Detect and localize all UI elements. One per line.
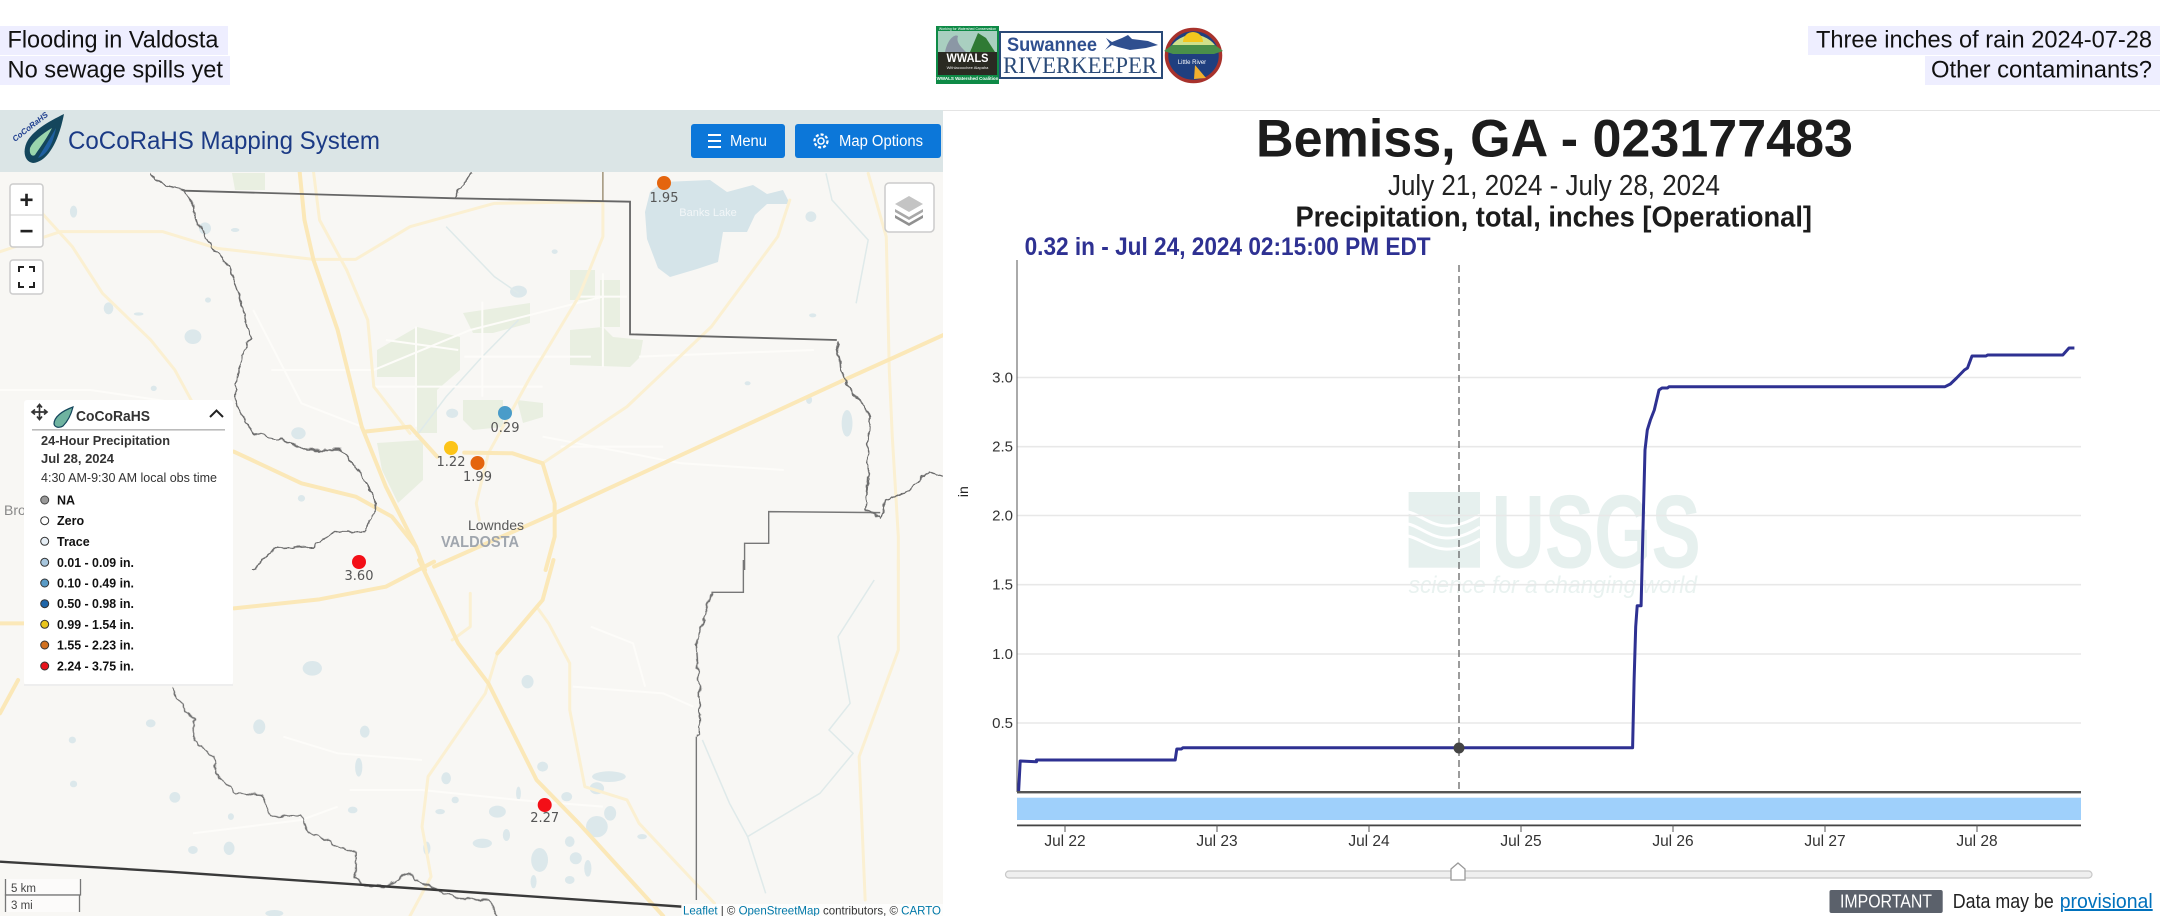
legend items: Zero <box>57 514 84 528</box>
heading: right caption <box>1808 26 2160 85</box>
chart parameter: Precipitation, total, inches [Operational] <box>1296 202 1812 234</box>
time axis: Jul 23 <box>1196 833 1238 850</box>
time axis: Jul 25 <box>1500 833 1542 850</box>
logo: Suwannee Riverkeeper <box>1000 32 1162 78</box>
y axis <box>955 260 1017 792</box>
map scale bar: 3 mi <box>11 900 33 912</box>
icon: CoCoRaHS logo: CoCoRaHS <box>11 110 50 144</box>
map title: CoCoRaHS Mapping System <box>68 127 380 155</box>
logo: Little River water trail: Little River <box>1178 60 1206 66</box>
map scale bar: 5 km <box>11 883 36 895</box>
chart tooltip value: 0.32 in - Jul 24, 2024 02:15:00 PM EDT <box>1025 233 1431 261</box>
panel: map legend <box>24 400 233 686</box>
legend items: 2.24 - 3.75 in. <box>57 660 134 674</box>
logo: WWALS: WWALS Watershed Coalition <box>937 76 999 81</box>
legend items: 0.50 - 0.98 in. <box>57 597 134 611</box>
data cursor <box>1458 265 1460 792</box>
map place labels <box>4 207 737 551</box>
data line <box>1019 348 2074 792</box>
y axis: in <box>955 486 971 497</box>
map place labels: Banks Lake <box>679 207 737 219</box>
button: Map Options: Map Options <box>839 133 923 150</box>
station markers: 1.95 <box>650 191 678 206</box>
map zoom controls: + <box>19 187 34 214</box>
legend items <box>41 494 134 674</box>
station markers: 1.99 <box>463 470 492 485</box>
legend items: 0.10 - 0.49 in. <box>57 576 134 590</box>
legend items: 0.99 - 1.54 in. <box>57 618 134 632</box>
time axis: Jul 26 <box>1652 833 1694 850</box>
legend items: NA <box>57 494 75 508</box>
time axis <box>1017 824 2081 850</box>
y axis: 0.5 <box>992 715 1013 732</box>
station markers: 2.27 <box>530 811 559 826</box>
divider <box>0 110 2160 111</box>
y axis: 3.0 <box>992 370 1013 386</box>
USGS watermark <box>1408 475 1701 599</box>
provisional data notice: IMPORTANT <box>1840 892 1932 912</box>
state line <box>0 862 681 907</box>
heading: left caption <box>0 26 230 85</box>
logo: WWALS: WWALS <box>946 51 988 65</box>
legend description <box>41 433 217 485</box>
logo: WWALS <box>936 26 999 84</box>
y axis: 1.0 <box>992 646 1013 663</box>
icon: CoCoRaHS logo <box>11 110 64 163</box>
legend description: Jul 28, 2024 <box>41 451 115 466</box>
y axis: 1.5 <box>992 577 1013 594</box>
time slider <box>1006 863 2092 880</box>
USGS watermark: science for a changing world <box>1409 572 1698 599</box>
time axis: Jul 28 <box>1956 833 1998 850</box>
panel: map header bar <box>0 110 943 172</box>
legend items: Trace <box>57 535 90 549</box>
logo: Suwannee Riverkeeper: Suwannee <box>1007 35 1097 56</box>
map place labels: VALDOSTA <box>441 534 519 551</box>
legend items: 0.01 - 0.09 in. <box>57 556 134 570</box>
chart title: Bemiss, GA - 023177483 <box>1256 110 1853 169</box>
button: Menu: Menu <box>730 133 767 150</box>
map zoom controls: − <box>19 218 34 245</box>
button: Map Options <box>795 124 941 158</box>
provisional data band <box>1017 798 2081 820</box>
time axis: Jul 27 <box>1804 833 1846 850</box>
chart date range: July 21, 2024 - July 28, 2024 <box>1388 170 1720 202</box>
x axis baseline <box>1017 791 2081 793</box>
icon: move <box>32 404 47 420</box>
logo: WWALS: Withlacoochee Alapaha <box>947 65 989 70</box>
provisional data notice: provisional <box>2060 891 2153 913</box>
map scale bar <box>6 879 80 912</box>
logo: WWALS: Working for Watershed Conservation <box>939 27 996 31</box>
icon: legend logo <box>54 407 73 427</box>
map zoom controls <box>10 184 43 247</box>
station markers: 0.29 <box>491 421 519 436</box>
station markers: 1.22 <box>437 455 465 470</box>
map place labels: Lowndes <box>468 517 524 533</box>
y axis: 2.0 <box>992 508 1013 524</box>
chart: precipitation time series <box>955 260 2081 850</box>
USGS watermark: USGS <box>1492 475 1701 591</box>
icon: map layers control <box>885 183 934 232</box>
map place labels: Bro <box>4 502 26 518</box>
station markers: 3.60 <box>345 569 373 584</box>
logo: Little River water trail <box>1164 30 1223 82</box>
grid lines <box>1017 378 2081 723</box>
logo: Suwannee Riverkeeper: RIVERKEEPER <box>1003 53 1158 78</box>
time axis: Jul 24 <box>1348 833 1390 850</box>
map base features <box>0 172 944 916</box>
legend description: 24-Hour Precipitation <box>41 433 170 448</box>
icon: fullscreen control <box>10 260 43 294</box>
y axis: 2.5 <box>992 439 1013 456</box>
icon: collapse chevron <box>210 410 223 417</box>
legend items: 1.55 - 2.23 in. <box>57 638 134 652</box>
button: Menu <box>691 124 785 158</box>
panel: rainfall map <box>0 172 944 916</box>
provisional data notice: Data may be <box>1953 891 2054 913</box>
time axis: Jul 22 <box>1044 833 1086 850</box>
provisional data notice <box>1830 890 2153 913</box>
wavy river county borders <box>151 173 944 916</box>
data point marker <box>1454 742 1464 754</box>
station markers <box>345 176 678 826</box>
heading: left caption: Flooding in Valdosta <box>8 27 219 54</box>
heading: right caption: Three inches of rain 2024-07-28 <box>1816 27 2152 54</box>
heading: right caption: Other contaminants? <box>1931 57 2152 84</box>
legend description: 4:30 AM-9:30 AM local obs time <box>41 470 217 485</box>
heading: left caption: No sewage spills yet <box>8 57 223 84</box>
legend title: CoCoRaHS <box>76 408 150 425</box>
